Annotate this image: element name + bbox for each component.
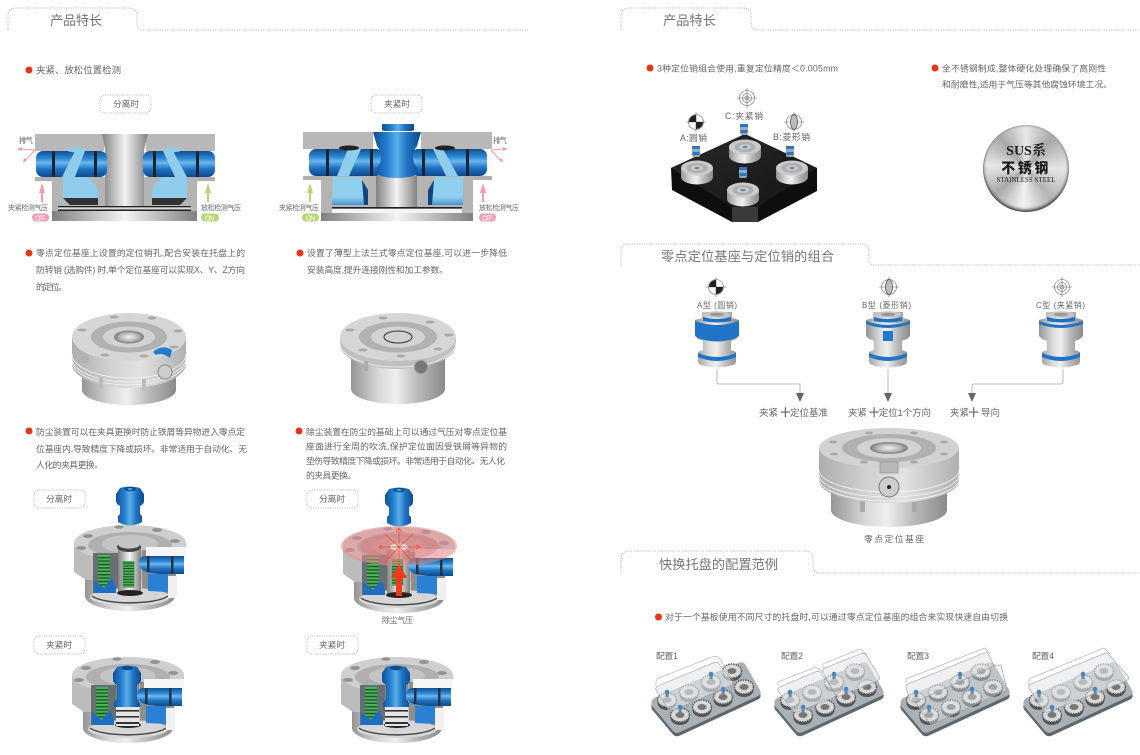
icon: B diamond (784, 112, 804, 132)
arrows and labels: clamped: OFF (482, 215, 493, 222)
arrows and labels: separated: 排气 (19, 135, 34, 145)
pill: 夹紧时 purge: 夹紧时 (319, 639, 345, 650)
product image: thin flange base (340, 313, 456, 404)
pin C (1039, 311, 1083, 368)
label: 夹紧+定位基准: 夹紧 ╋定位基准 (759, 407, 828, 419)
bullet: 全不锈钢 (932, 62, 1112, 90)
text block: 除尘装置 (296, 426, 507, 480)
text block: 薄型上法兰: 安装高度,提升连接刚性和加工参数。 (307, 264, 448, 275)
icon: A round (686, 112, 706, 132)
config 1 (651, 651, 761, 736)
pill: 分离时 dust (34, 490, 85, 508)
cross-section diagram: clamped (279, 124, 519, 222)
badge: SUS stainless steel: STAINLESS STEEL (997, 177, 1055, 184)
pin A (695, 311, 739, 368)
cutaway: dust cover separated (74, 486, 186, 611)
pill: 分离时 purge: 分离时 (319, 493, 345, 504)
pill: 夹紧时: 夹紧时 (384, 98, 410, 109)
arrows and labels: clamped: 夹紧检测气压 (279, 203, 319, 212)
label: C型: C型 (夹紧销) (1036, 300, 1085, 310)
badge: SUS stainless steel (983, 125, 1069, 212)
label: 夹紧+定位1个方向: 夹紧 ╋定位1个方向 (848, 407, 931, 419)
pill: 夹紧时 (371, 95, 422, 113)
text block: 除尘装置: 垫伤导致精度下降或损坏。非常适用于自动化、无人化 (306, 455, 505, 466)
pill: 分离时 (100, 95, 151, 113)
section tab: 产品特长 left (8, 8, 528, 30)
pill: 分离时 dust: 分离时 (46, 493, 72, 504)
label: 零点定位基座: 零点定位基座 (864, 533, 924, 544)
text block: 防尘装置: 位基座内,导致精度下降或损坏。非常适用于自动化、无 (36, 443, 247, 454)
badge: SUS stainless steel: 不锈钢 (1001, 158, 1051, 178)
arrows and labels: clamped: ON (306, 215, 315, 222)
badge: SUS stainless steel: SUS系 (1006, 144, 1046, 159)
pill: 夹紧时 dust (34, 636, 85, 654)
text block: 防尘装置 (26, 426, 247, 470)
text block: 除尘装置: 除尘装置在防尘的基础上可以通过气压对零点定位基 (306, 426, 507, 437)
section tab: 快换托盘的配置范例: 快换托盘的配置范例 (659, 556, 778, 572)
icon: C型 (1052, 277, 1072, 297)
text block: 防尘装置: 人化的夹具更换。 (36, 459, 103, 470)
icon: B型 (879, 277, 899, 297)
text block: 定位销孔: 零点定位基座上设置的定位销孔,配合安装在托盘上的 (36, 247, 245, 258)
label: 除尘气压: 除尘气压 (382, 615, 413, 625)
config 2: 配置2 (781, 651, 803, 661)
bullet: 全不锈钢: 和耐磨性,适用于气压等其他腐蚀环境工况。 (942, 78, 1112, 90)
icon: C target (737, 88, 757, 108)
text block: 防尘装置: 防尘装置可以在夹具更换时防止铁屑等异物进入零点定 (36, 426, 245, 437)
section tab: 基座与定位销的组合: 零点定位基座与定位销的组合 (661, 249, 834, 264)
pin B (866, 311, 910, 368)
text block: 定位销孔: 防转销 (选购件) 时,单个定位基座可以实现X、Y、Z方向 (36, 264, 245, 275)
arrows and labels: separated: ON (205, 215, 214, 222)
cutaway: purge clamped (341, 657, 453, 743)
arrows and labels: clamped: 排气 (493, 135, 508, 145)
product image: flanged base (72, 313, 186, 405)
icon: A型 (706, 277, 726, 297)
pill: 夹紧时 dust: 夹紧时 (46, 639, 72, 650)
arrows and labels: clamped (279, 135, 519, 222)
config 3: 配置3 (907, 651, 929, 661)
text block: 定位销孔: 的定位。 (36, 281, 67, 292)
arrow: C to 导向 (968, 369, 1063, 402)
section tab: 基座与定位销的组合 (621, 244, 1140, 265)
plate with bases and pins (671, 124, 817, 222)
large base (819, 428, 959, 527)
label: B 菱形销: B:菱形销 (773, 131, 810, 142)
label: C 夹紧销: C:夹紧销 (725, 110, 763, 121)
section tab: 产品特长 left: 产品特长 (50, 13, 102, 28)
bullet: 基板托盘: 对于一个基板使用不同尺寸的托盘时,可以通过零点定位基座的组合来实现快速自由切换 (665, 611, 1008, 622)
bullet: 夹紧、放松位置检测: 夹紧、放松位置检测 (36, 64, 121, 76)
icon: blow arrows (379, 528, 420, 574)
arrows and labels: separated (8, 135, 241, 222)
section tab: 快换托盘的配置范例 (621, 551, 1140, 573)
arrows and labels: separated: OFF (35, 215, 46, 222)
config 4: 配置4 (1032, 651, 1054, 661)
pill: 分离时 purge (307, 490, 358, 508)
cutaway: purge air separated (341, 488, 457, 613)
config 3 (900, 648, 1010, 736)
arrow: B to 定位1个方向 (884, 369, 892, 402)
config 4 (1023, 648, 1133, 736)
config 1: 配置1 (656, 651, 678, 661)
bullet: 全不锈钢: 全不锈钢制成,整体硬化处理确保了高刚性 (942, 62, 1106, 74)
section tab: 产品特长 right (621, 8, 1140, 30)
cross-section diagram: separated (8, 134, 241, 222)
arrows and labels: clamped: 放松检测气压 (479, 203, 519, 212)
text block: 薄型上法兰: 设置了薄型上法兰式零点定位基座,可以进一步降低 (307, 247, 507, 258)
bullet: 3种定位销: 3种定位销组合使用,重复定位精度＜0.005mm (657, 62, 838, 74)
text block: 定位销孔 (26, 247, 245, 292)
pill: 分离时: 分离时 (113, 98, 139, 109)
arrow: A to 定位基准 (717, 369, 804, 402)
label: A 圆销: A:圆销 (680, 132, 707, 143)
config 2 (774, 649, 884, 736)
section tab: 产品特长 right: 产品特长 (663, 13, 716, 28)
label: 夹紧+导向: 夹紧╋ 导向 (950, 407, 1000, 419)
cutaway: dust cover clamped (72, 657, 184, 743)
label: A型: A型 (圆销) (697, 300, 737, 310)
text block: 除尘装置: 座面进行全周的吹洗,保护定位面因受铁屑等异物的 (306, 440, 507, 452)
text block: 除尘装置: 的夹具更换。 (306, 470, 356, 480)
text block: 薄型上法兰 (296, 247, 507, 275)
arrows and labels: separated: 放松检测气压 (201, 203, 241, 212)
arrows and labels: separated: 夹紧检测气压 (8, 203, 48, 212)
label: B型: B型 (菱形销) (862, 300, 911, 310)
pill: 夹紧时 purge (307, 636, 358, 654)
